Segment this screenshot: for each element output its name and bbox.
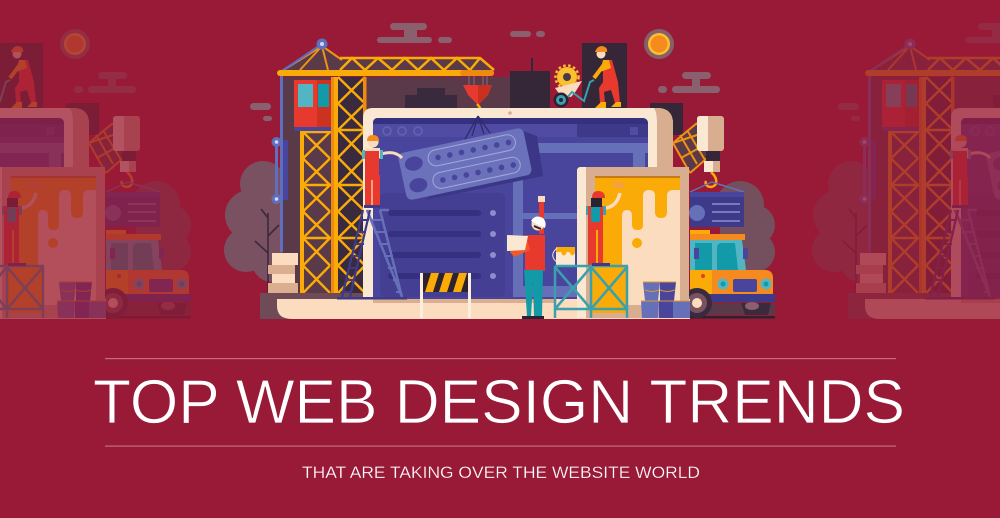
crane cabin (294, 80, 331, 131)
worker on ladder (362, 135, 402, 208)
title: TOP WEB DESIGN TRENDS (93, 368, 905, 437)
subtitle: THAT ARE TAKING OVER THE WEBSITE WORLD (302, 464, 700, 482)
ghost illustration left (0, 23, 191, 319)
base shadow (373, 299, 555, 303)
laptop frame shade (654, 108, 673, 170)
bricks (268, 253, 298, 293)
second crane arm (673, 123, 713, 173)
right tree (716, 181, 775, 272)
crane jib (277, 38, 494, 76)
sun (644, 29, 674, 59)
crane cable and pulleys (272, 76, 288, 252)
laptop (277, 108, 690, 319)
truck (682, 230, 775, 318)
clouds (250, 23, 720, 121)
stand block (260, 293, 364, 319)
worker with blueprint (507, 196, 546, 319)
paint buckets (641, 282, 690, 318)
bottom rule (105, 446, 896, 447)
panel frame (577, 167, 689, 318)
top rule (105, 358, 896, 359)
background buildings (282, 43, 683, 297)
laptop camera (508, 111, 512, 115)
gear (556, 66, 578, 88)
ghost illustration right (812, 23, 1000, 319)
laptop frame (363, 108, 673, 300)
paint can (553, 247, 575, 265)
screen (373, 118, 648, 299)
paint panel (577, 167, 689, 318)
paint drips (622, 190, 680, 305)
scaffold (555, 263, 628, 318)
painter worker (586, 182, 624, 265)
barrier (420, 273, 471, 318)
crane hook (463, 76, 492, 117)
panel top shade (595, 176, 680, 178)
list panel (380, 193, 505, 297)
hoist box (697, 116, 724, 187)
tower crane (272, 38, 494, 294)
main illustration: website under construction (224, 23, 775, 319)
worker with wheelbarrow (594, 46, 621, 108)
yellow paint (595, 176, 680, 305)
ladder (337, 210, 407, 300)
laptop base (277, 299, 690, 319)
paint droplet (632, 238, 642, 248)
crane tower (300, 77, 366, 294)
wheelbarrow (554, 80, 594, 108)
hanging sign (689, 182, 744, 227)
panel light edge (577, 167, 586, 318)
wheelbarrow and gear (554, 66, 594, 108)
cables to card (465, 116, 490, 139)
left tree (224, 161, 300, 293)
tilted form card (397, 127, 543, 201)
